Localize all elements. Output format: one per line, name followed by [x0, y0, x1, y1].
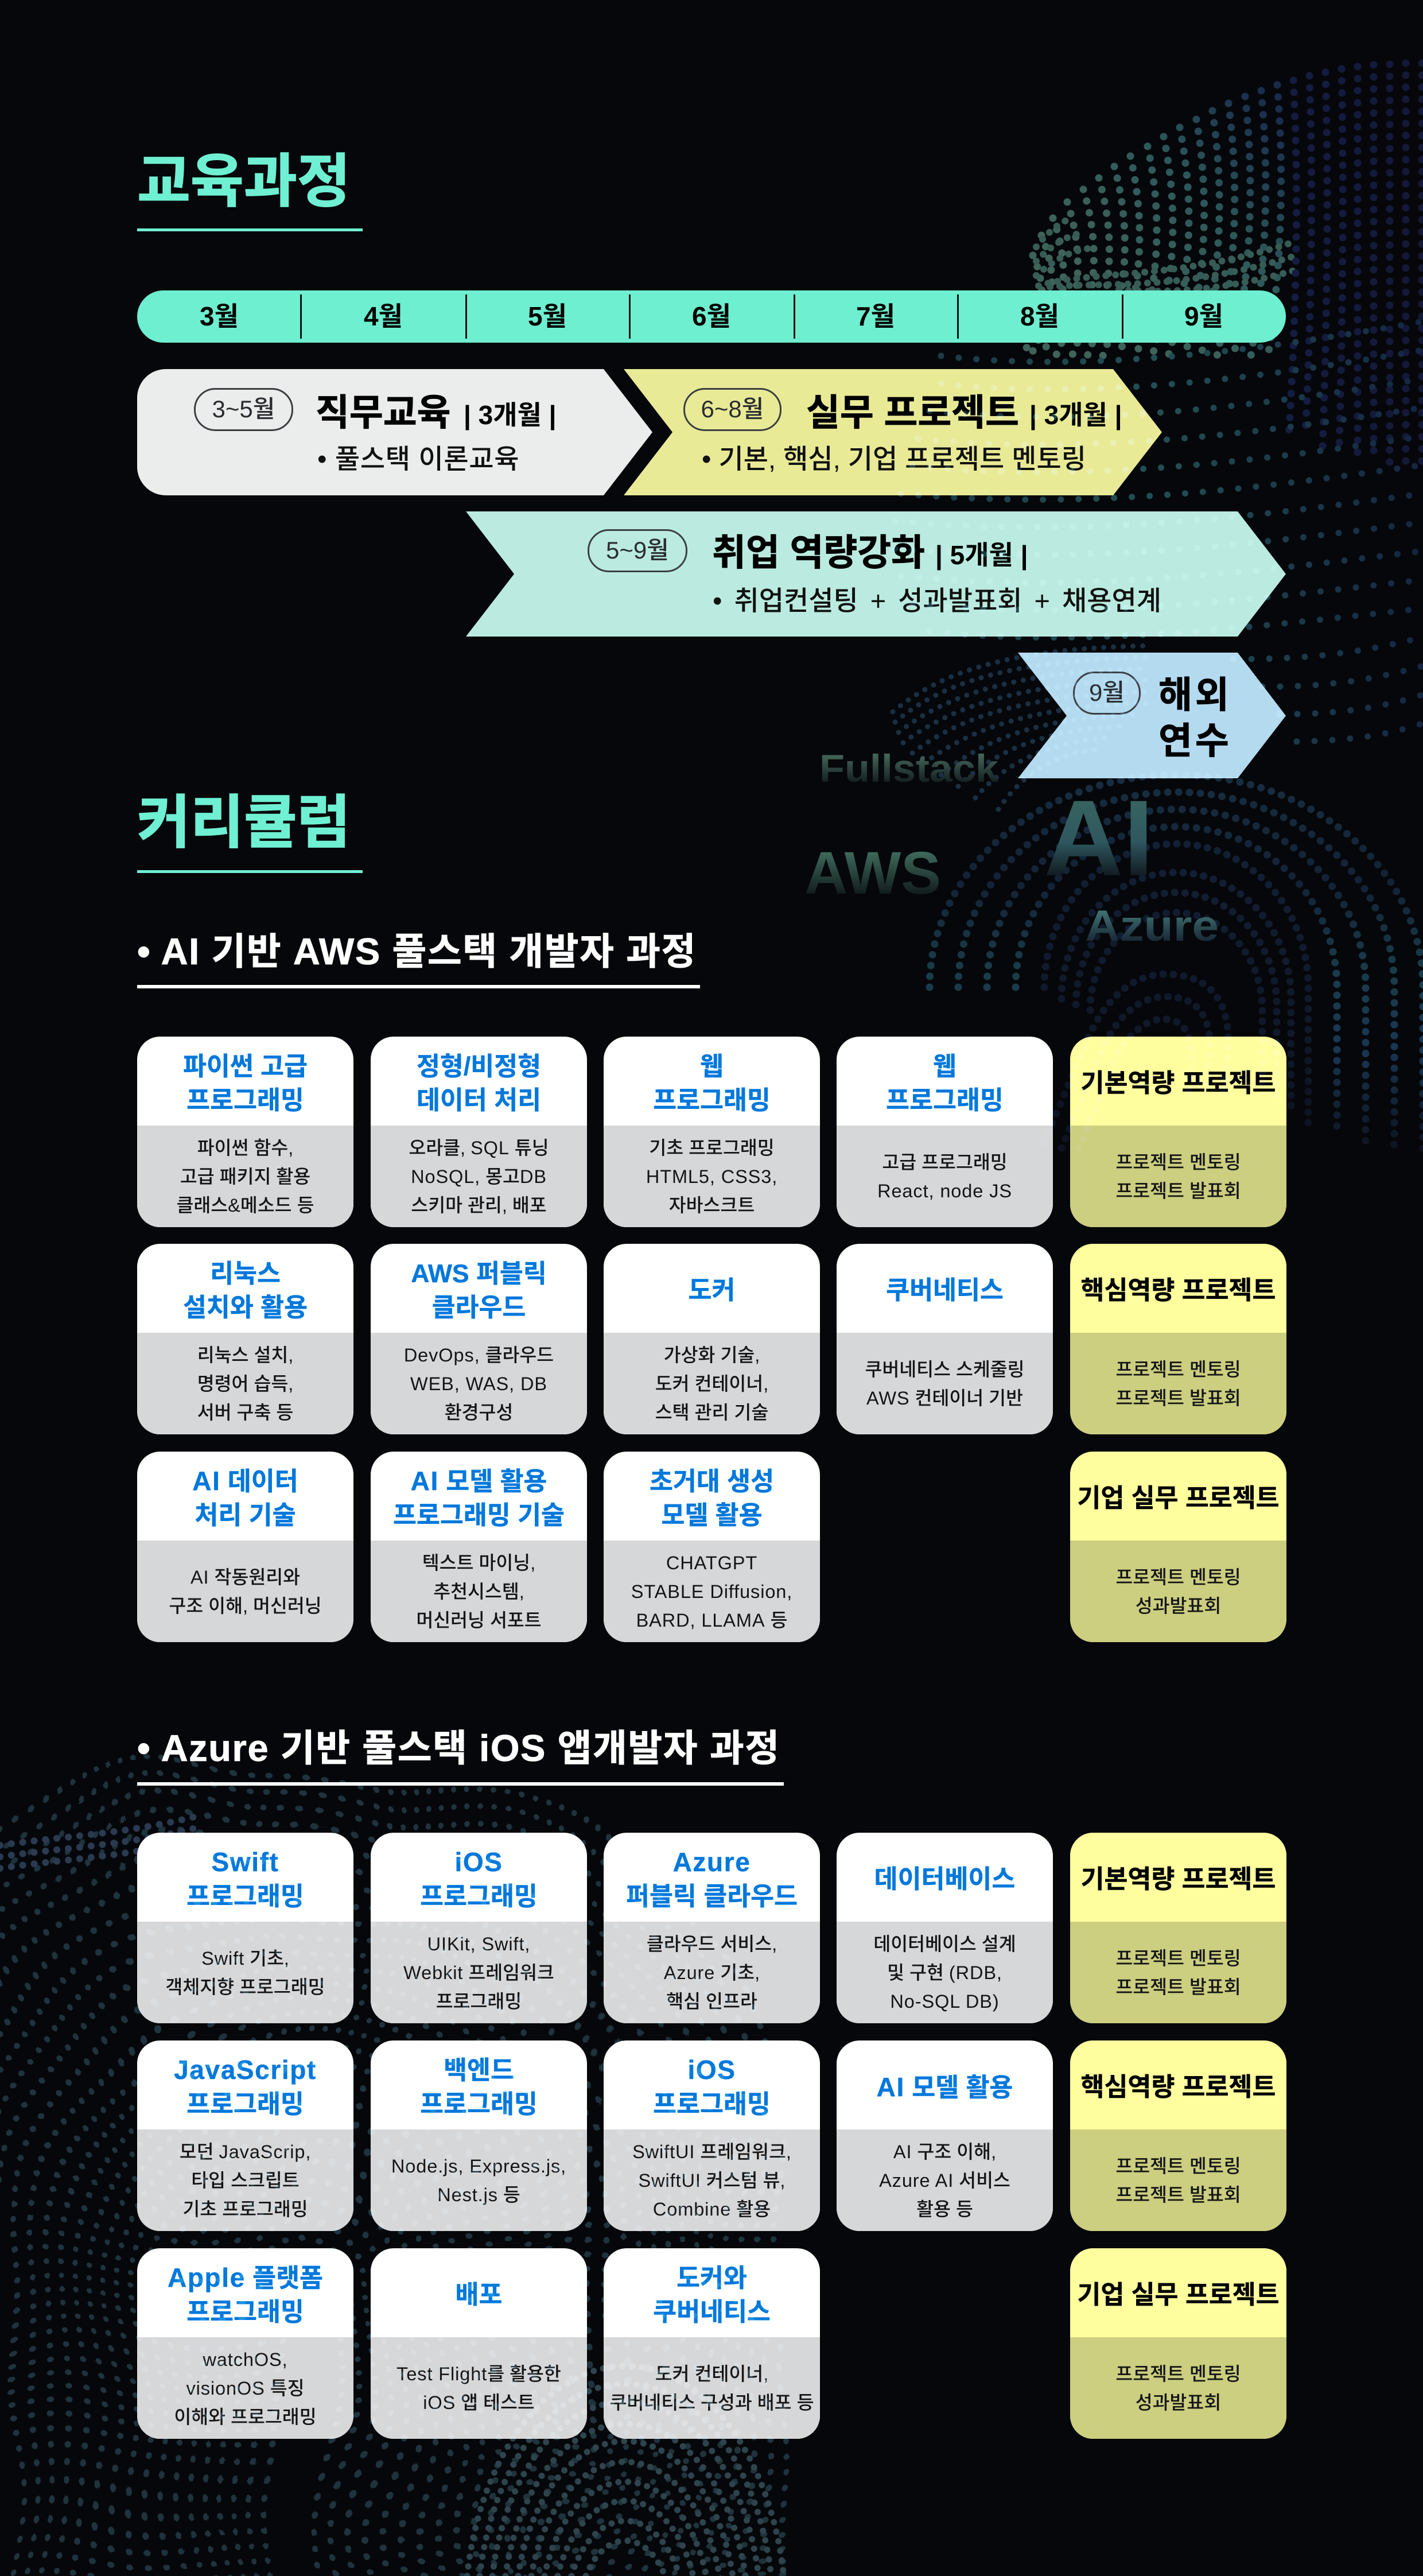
ghost text: AI: AI: [1044, 778, 1154, 898]
card: 핵심역량 프로젝트: 핵심역량 프로젝트: [1081, 1277, 1276, 1305]
card: Apple 플랫폼 프로그래밍: 이해와 프로그래밍: [174, 2406, 317, 2427]
card: AI 데이터 처리 기술: AI 데이터: [192, 1466, 298, 1496]
card: AWS 퍼블릭 클라우드: DevOps, 클라우드: [404, 1344, 554, 1365]
card: 도커와 쿠버네티스: 쿠버네티스 구성과 배포 등: [609, 2392, 814, 2413]
card: AI 데이터 처리 기술: 구조 이해, 머신러닝: [169, 1596, 322, 1616]
card: 도커와 쿠버네티스: [604, 2248, 820, 2439]
card: Swift 프로그래밍: 프로그래밍: [186, 1883, 304, 1911]
dots: upper hump columns: [1021, 85, 1281, 356]
pill: 6~8월: [683, 388, 782, 431]
timeline bar: months: 9월: [1184, 301, 1223, 331]
card: 초거대 생성 모델 활용: 초거대 생성: [650, 1467, 774, 1496]
card: iOS 프로그래밍 SwiftUI: Combine 활용: [653, 2198, 771, 2219]
card: 웹 프로그래밍 고급: 고급 프로그래밍: [882, 1151, 1008, 1172]
card: 도커: 도커 컨테이너,: [655, 1373, 768, 1394]
card: 기본역량 프로젝트: 프로젝트 발표회: [1115, 1180, 1241, 1201]
card: AI 모델 활용: [837, 2040, 1053, 2231]
card: 기업 실무 프로젝트: 기업 실무 프로젝트: [1077, 1484, 1280, 1512]
timeline bar: months: 4월: [364, 301, 403, 331]
card: 파이썬 고급 프로그래밍: 클래스&메소드 등: [176, 1195, 314, 1216]
card: JavaScript 프로그래밍: [137, 2040, 353, 2231]
card: iOS 프로그래밍 SwiftUI: SwiftUI 커스텀 뷰,: [639, 2170, 785, 2190]
card: 웹 프로그래밍 고급: 웹: [933, 1053, 957, 1080]
duration: 3개월: | 3개월 |: [464, 400, 557, 430]
card: 백엔드 프로그래밍: Nest.js 등: [437, 2185, 520, 2205]
title: 실무 프로젝트: 실무 프로젝트: [806, 392, 1019, 433]
dots: lower left lighter band: [0, 1817, 195, 1868]
timeline bar: months: 8월: [1020, 301, 1059, 331]
card: 핵심역량 프로젝트: 프로젝트 멘토링: [1115, 2156, 1241, 2177]
card: 기업 실무 프로젝트: [1070, 2248, 1286, 2439]
card: AI 모델 활용 프로그래밍 기술: 프로그래밍 기술: [393, 1502, 565, 1530]
card: 파이썬 고급 프로그래밍: 파이썬 함수,: [197, 1138, 293, 1158]
card: 백엔드 프로그래밍: 프로그래밍: [420, 2090, 538, 2118]
card: 배포: Test Flight를 활용한: [396, 2364, 561, 2384]
pill: 3~5월: 3~5월: [212, 395, 275, 422]
card: 핵심역량 프로젝트: 프로젝트 발표회: [1115, 1388, 1241, 1409]
card: Azure 퍼블릭 클라우드: Azure: [673, 1847, 751, 1877]
card: AI 모델 활용: Azure AI 서비스: [879, 2170, 1010, 2190]
ghost text: AWS: AWS: [804, 840, 941, 907]
card: 백엔드 프로그래밍: Node.js, Express.js,: [391, 2156, 566, 2177]
card: 정형/비정형 데이터 처리: 스키마 관리, 배포: [411, 1195, 547, 1216]
card: Swift 프로그래밍: [137, 1833, 353, 2023]
card: Swift 프로그래밍: Swift: [212, 1847, 279, 1877]
dots: hump right columns: [1289, 63, 1422, 471]
card: 기본역량 프로젝트: 프로젝트 멘토링: [1115, 1151, 1241, 1172]
card: 파이썬 고급 프로그래밍: [137, 1037, 353, 1227]
card: 핵심역량 프로젝트: 핵심역량 프로젝트: [1081, 2073, 1276, 2101]
card: 도커: 가상화 기술,: [664, 1344, 760, 1365]
card: 도커: [604, 1244, 820, 1434]
card: 웹 프로그래밍 기초: 자바스크트: [669, 1195, 755, 1216]
card: 데이터베이스: 데이터베이스 설계: [873, 1933, 1016, 1954]
card: JavaScript 프로그래밍: 기초 프로그래밍: [182, 2198, 308, 2219]
title: 해외 연수: 연수: [1158, 720, 1232, 762]
card: 정형/비정형 데이터 처리: [371, 1037, 587, 1227]
card: iOS 프로그래밍: UIKit, Swift,: [427, 1933, 530, 1954]
timeline bar: months: 5월: [528, 301, 567, 331]
card: 리눅스 설치와 활용: [137, 1244, 353, 1434]
card: iOS 프로그래밍: iOS: [454, 1847, 503, 1877]
card: Azure 퍼블릭 클라우드: [604, 1833, 820, 2023]
card: 기업 실무 프로젝트: [1070, 1452, 1286, 1642]
card: Swift 프로그래밍: Swift 기초,: [201, 1948, 289, 1969]
card: 초거대 생성 모델 활용: CHATGPT: [666, 1552, 757, 1573]
card: JavaScript 프로그래밍: JavaScript: [174, 2055, 317, 2085]
card: iOS 프로그래밍 SwiftUI: [604, 2040, 820, 2231]
dots: lower left dense dome: [467, 2366, 784, 2576]
timeline bar: months: 7월: [856, 301, 895, 331]
card: 쿠버네티스: [837, 1244, 1053, 1434]
card: 초거대 생성 모델 활용: 모델 활용: [661, 1502, 763, 1529]
card: AWS 퍼블릭 클라우드: [371, 1244, 587, 1434]
card: 리눅스 설치와 활용: 서버 구축 등: [197, 1402, 293, 1422]
card: 웹 프로그래밍 기초: HTML5, CSS3,: [646, 1166, 777, 1187]
card: 배포: 배포: [456, 2281, 502, 2309]
card: 배포: [371, 2248, 587, 2439]
heading: 커리큘럼: 커리큘럼: [137, 791, 351, 855]
card: 파이썬 고급 프로그래밍: 고급 패키지 활용: [180, 1166, 310, 1187]
ghost text: Azure: Azure: [1085, 902, 1219, 951]
card: AI 모델 활용: AI 구조 이해,: [893, 2141, 996, 2162]
title: 해외 연수: [1160, 676, 1228, 758]
title: 직무교육: 직무교육: [316, 392, 451, 433]
card: iOS 프로그래밍 SwiftUI: SwiftUI 프레임워크,: [632, 2141, 791, 2162]
card: AWS 퍼블릭 클라우드: WEB, WAS, DB: [410, 1373, 547, 1394]
card: AI 모델 활용 프로그래밍 기술: AI 모델 활용: [411, 1466, 547, 1496]
card: 기본역량 프로젝트: 기본역량 프로젝트: [1081, 1865, 1276, 1894]
card: 도커: 스택 관리 기술: [655, 1402, 768, 1422]
card: 정형/비정형 데이터 처리: 데이터 처리: [417, 1086, 541, 1115]
card: 기본역량 프로젝트: [1070, 1833, 1286, 2023]
card: 핵심역량 프로젝트: [1070, 2040, 1286, 2231]
pill: 5~9월: [588, 529, 687, 572]
card: 기업 실무 프로젝트: 성과발표회: [1136, 1596, 1221, 1616]
card: Apple 플랫폼 프로그래밍: visionOS 특징: [186, 2377, 305, 2398]
card: 데이터베이스: 및 구현 (RDB,: [887, 1962, 1002, 1983]
card: iOS 프로그래밍: 프로그래밍: [436, 1991, 522, 2011]
duration: 3개월: | 3개월 |: [1029, 400, 1122, 430]
card: 웹 프로그래밍 고급: 프로그래밍: [886, 1086, 1004, 1115]
duration: 5개월: | 5개월 |: [935, 540, 1028, 570]
card: 핵심역량 프로젝트: [1070, 1244, 1286, 1434]
title: 해외 연수: 해외: [1158, 674, 1232, 716]
card: 쿠버네티스: AWS 컨테이너 기반: [866, 1388, 1023, 1409]
dots: sparse middle field: [895, 321, 1423, 742]
card: 웹 프로그래밍 고급: React, node JS: [877, 1180, 1012, 1201]
card: 도커와 쿠버네티스: 도커 컨테이너,: [655, 2364, 768, 2384]
dots: small hump near Fullstack: [893, 646, 1148, 809]
card: AI 모델 활용 프로그래밍 기술: 텍스트 마이닝,: [422, 1552, 535, 1573]
arrow: 실무 프로젝트: [624, 369, 1162, 495]
card: 백엔드 프로그래밍: 백엔드: [444, 2056, 514, 2085]
card: AWS 퍼블릭 클라우드: AWS 퍼블릭: [411, 1259, 547, 1288]
card: 핵심역량 프로젝트: 프로젝트 멘토링: [1115, 1359, 1241, 1380]
text: 기본, 핵심, 기업 프로젝트 멘토링: • 기본, 핵심, 기업 프로젝트 멘토링: [702, 444, 1086, 474]
card: 초거대 생성 모델 활용: [604, 1452, 820, 1642]
card: AI 모델 활용 프로그래밍 기술: [371, 1452, 587, 1642]
ghost text: Fullstack: Fullstack: [819, 747, 998, 790]
card: 도커: 도커: [689, 1277, 735, 1305]
card: 핵심역량 프로젝트: 프로젝트 발표회: [1115, 2185, 1241, 2205]
pill: 6~8월: 6~8월: [701, 395, 764, 422]
card: 기업 실무 프로젝트: 프로젝트 멘토링: [1115, 1567, 1241, 1588]
card: AWS 퍼블릭 클라우드: 환경구성: [445, 1402, 513, 1422]
card: 백엔드 프로그래밍: [371, 2040, 587, 2231]
pill: 9월: [1073, 672, 1141, 715]
card: JavaScript 프로그래밍: 모던 JavaScrip,: [180, 2141, 311, 2162]
card: 파이썬 고급 프로그래밍: 프로그래밍: [186, 1086, 304, 1115]
card: 웹 프로그래밍 기초: 기초 프로그래밍: [649, 1138, 775, 1158]
card: 기업 실무 프로젝트: 프로젝트 멘토링: [1115, 2364, 1241, 2384]
timeline bar: months: 6월: [692, 301, 731, 331]
timeline bar: months: 3월: [200, 301, 239, 331]
card: 파이썬 고급 프로그래밍: 파이썬 고급: [183, 1053, 308, 1080]
card: iOS 프로그래밍 SwiftUI: iOS: [687, 2055, 736, 2085]
subheading: AWS 과정: • AI 기반 AWS 풀스택 개발자 과정: [137, 930, 697, 972]
card: Swift 프로그래밍: 객체지향 프로그래밍: [165, 1977, 325, 1997]
card: 도커와 쿠버네티스: 도커와: [676, 2264, 747, 2292]
card: 초거대 생성 모델 활용: STABLE Diffusion,: [631, 1581, 792, 1601]
card: AWS 퍼블릭 클라우드: 클라우드: [432, 1294, 526, 1321]
arrow: 해외 연수: [1018, 653, 1286, 778]
card: Azure 퍼블릭 클라우드: 클라우드 서비스,: [647, 1933, 777, 1954]
card: iOS 프로그래밍: 프로그래밍: [420, 1883, 538, 1911]
dots: inner arcs: [1044, 844, 1308, 1148]
dots: lower arcs: [930, 775, 1423, 1154]
card: AI 데이터 처리 기술: AI 작동원리와: [190, 1567, 300, 1588]
card: JavaScript 프로그래밍: 프로그래밍: [186, 2090, 304, 2119]
card: 쿠버네티스: 쿠버네티스: [886, 1277, 1004, 1305]
card: 쿠버네티스: 쿠버네티스 스케줄링: [865, 1359, 1025, 1380]
card: 기업 실무 프로젝트: 성과발표회: [1136, 2392, 1221, 2413]
card: 리눅스 설치와 활용: 명령어 습득,: [197, 1373, 293, 1394]
card: 배포: iOS 앱 테스트: [423, 2392, 535, 2413]
card: 리눅스 설치와 활용: 리눅스 설치,: [197, 1344, 293, 1365]
card: 웹 프로그래밍 기초: [604, 1037, 820, 1227]
card: 정형/비정형 데이터 처리: NoSQL, 몽고DB: [411, 1166, 547, 1187]
card: 웹 프로그래밍 기초: 프로그래밍: [653, 1086, 771, 1115]
dots: lower left wave: [0, 1771, 780, 2576]
card: AI 모델 활용 프로그래밍 기술: 추천시스템,: [433, 1581, 524, 1601]
card: AI 모델 활용: AI 모델 활용: [877, 2072, 1013, 2102]
card: 기본역량 프로젝트: [1070, 1037, 1286, 1227]
heading: 교육과정: 교육과정: [137, 150, 351, 214]
text: 취업컨설팅 + 성과발표회 + 채용연계: • 취업컨설팅 + 성과발표회 + 채용연계: [713, 585, 1161, 616]
title: 취업 역량강화: 취업 역량강화: [712, 532, 925, 573]
card: 웹 프로그래밍 기초: 웹: [700, 1053, 724, 1080]
pill: 9월: 9월: [1089, 679, 1125, 706]
card: 정형/비정형 데이터 처리: 정형/비정형: [417, 1053, 541, 1080]
card: Apple 플랫폼 프로그래밍: Apple 플랫폼: [168, 2263, 323, 2292]
card: iOS 프로그래밍 SwiftUI: 프로그래밍: [653, 2090, 771, 2119]
card: 리눅스 설치와 활용: 리눅스: [210, 1259, 281, 1288]
card: AI 모델 활용 프로그래밍 기술: 머신러닝 서포트: [416, 1609, 542, 1630]
card: 초거대 생성 모델 활용: BARD, LLAMA 등: [636, 1609, 787, 1630]
card: 데이터베이스: [837, 1833, 1053, 2023]
card: iOS 프로그래밍: Webkit 프레임워크: [403, 1962, 554, 1983]
card: Azure 퍼블릭 클라우드: 핵심 인프라: [666, 1991, 757, 2011]
timeline bar: months: [137, 290, 1286, 343]
card: Apple 플랫폼 프로그래밍: 프로그래밍: [186, 2298, 304, 2326]
card: 기업 실무 프로젝트: 기업 실무 프로젝트: [1077, 2281, 1280, 2309]
card: 기본역량 프로젝트: 프로젝트 발표회: [1115, 1977, 1241, 1997]
dots: hump lower dense rows: [1036, 218, 1297, 291]
card: AI 데이터 처리 기술: [137, 1452, 353, 1642]
card: Azure 퍼블릭 클라우드: 퍼블릭 클라우드: [626, 1883, 798, 1911]
card: 정형/비정형 데이터 처리: 오라클, SQL 튜닝: [409, 1138, 549, 1158]
text: 풀스택 이론교육: • 풀스택 이론교육: [317, 444, 519, 474]
card: 웹 프로그래밍 고급: [837, 1037, 1053, 1227]
card: 기본역량 프로젝트: 기본역량 프로젝트: [1081, 1069, 1276, 1097]
card: JavaScript 프로그래밍: 타입 스크립트: [191, 2170, 300, 2190]
card: 리눅스 설치와 활용: 설치와 활용: [183, 1294, 308, 1321]
arrow: 취업 역량강화: [466, 511, 1286, 637]
card: 기본역량 프로젝트: 프로젝트 멘토링: [1115, 1948, 1241, 1969]
card: iOS 프로그래밍: [371, 1833, 587, 2023]
card: Apple 플랫폼 프로그래밍: [137, 2248, 353, 2439]
pill: 3~5월: [194, 388, 293, 431]
card: AI 모델 활용: 활용 등: [916, 2198, 973, 2219]
pill: 5~9월: 5~9월: [606, 537, 669, 564]
card: 데이터베이스: No-SQL DB): [890, 1991, 1000, 2011]
card: Apple 플랫폼 프로그래밍: watchOS,: [203, 2349, 288, 2369]
card: AI 데이터 처리 기술: 처리 기술: [195, 1502, 296, 1530]
card: 도커와 쿠버네티스: 쿠버네티스: [653, 2298, 771, 2326]
card: 데이터베이스: 데이터베이스: [874, 1865, 1015, 1894]
arrow: 직무교육: [137, 369, 652, 495]
subheading: Azure 과정: • Azure 기반 풀스택 iOS 앱개발자 과정: [137, 1727, 780, 1769]
card: Azure 퍼블릭 클라우드: Azure 기초,: [664, 1962, 760, 1983]
